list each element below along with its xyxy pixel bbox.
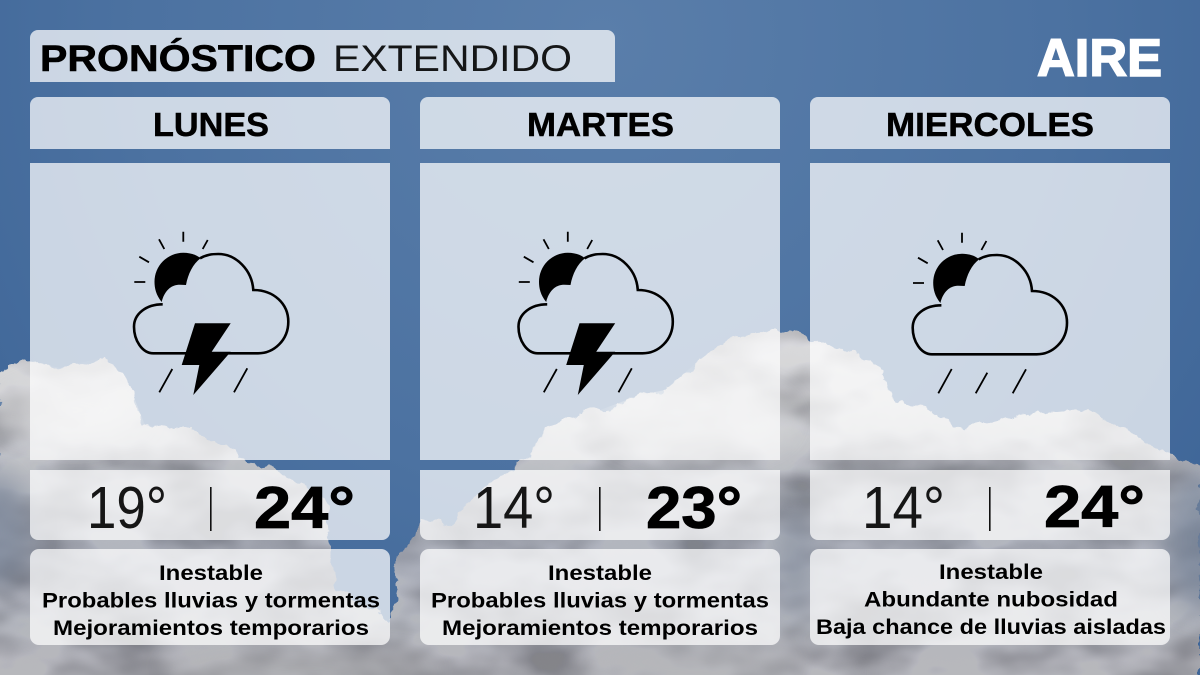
forecast text: lunes: [30, 549, 390, 645]
temperature: miercoles: 14°: [862, 475, 945, 541]
temperature: lunes: [30, 470, 390, 541]
forecast text: martes: Probables lluvias y tormentas: [431, 590, 769, 612]
image panel: martes: [420, 163, 780, 460]
temperature: martes: [420, 470, 780, 541]
day header: martes: [420, 97, 780, 149]
icon: sun, cloud, lightning and rain: [134, 232, 288, 395]
forecast text: martes: [420, 549, 780, 645]
forecast text: lunes: Probables lluvias y tormentas: [42, 590, 380, 612]
panel: lunes: [30, 97, 390, 645]
temperature: miercoles: [810, 470, 1170, 541]
day header: lunes: [30, 97, 390, 149]
temperature: lunes: 19°: [87, 475, 167, 541]
day header: miercoles: MIERCOLES: [886, 106, 1094, 143]
forecast text: miercoles: Inestable: [939, 561, 1043, 584]
forecast text: miercoles: Baja chance de lluvias aisladas: [816, 616, 1166, 639]
day header: lunes: LUNES: [153, 106, 269, 143]
forecast text: lunes: Mejoramientos temporarios: [53, 617, 369, 640]
day header: miercoles: [810, 97, 1170, 149]
image panel: lunes: [30, 163, 390, 460]
forecast text: lunes: Inestable: [159, 562, 263, 585]
day header: martes: MARTES: [527, 106, 674, 143]
temperature: martes: 23°: [646, 475, 742, 541]
image panel: miercoles: [810, 163, 1170, 460]
title bar: [30, 30, 615, 82]
temperature: martes: 14°: [473, 475, 555, 541]
forecast text: martes: Mejoramientos temporarios: [442, 617, 758, 640]
temperature: miercoles: 24°: [1044, 474, 1145, 540]
icon: sun, cloud, lightning and rain: [518, 232, 673, 395]
forecast text: miercoles: [810, 549, 1170, 645]
icon: sun, cloud and rain: [913, 233, 1067, 393]
panel: miercoles: [810, 97, 1170, 645]
panel: martes: [420, 97, 780, 645]
forecast text: miercoles: Abundante nubosidad: [864, 588, 1118, 612]
logo: AIRE: AIRE: [1037, 29, 1162, 88]
temperature: lunes: 24°: [254, 475, 355, 541]
title bar: EXTENDIDO: [333, 38, 572, 79]
title bar: PRONÓSTICO: [40, 37, 316, 79]
forecast text: martes: Inestable: [548, 562, 652, 585]
